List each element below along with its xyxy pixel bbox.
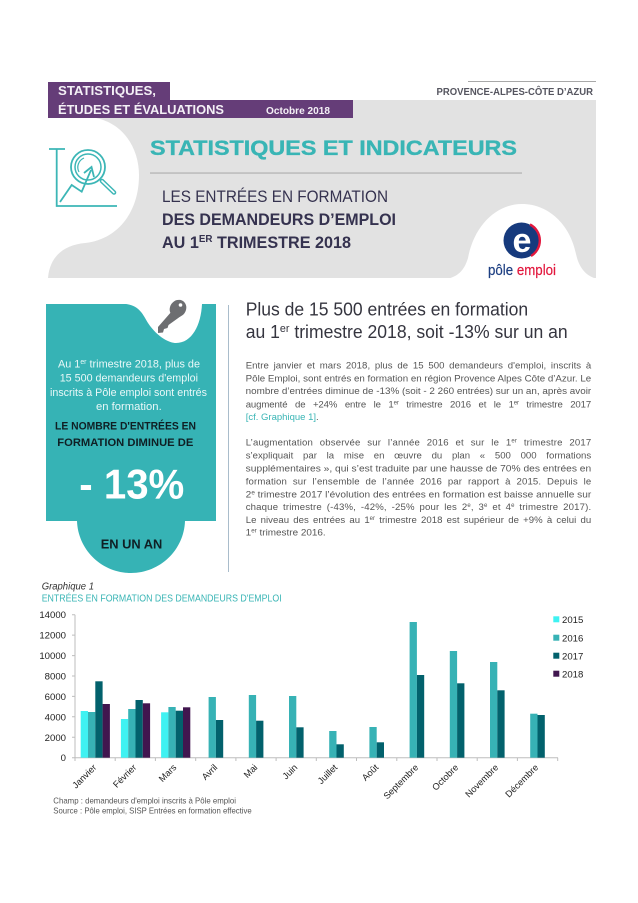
text block: paragraph 2: e bbox=[484, 503, 488, 509]
text block: paragraph 2: e bbox=[511, 503, 515, 509]
intro text: trimestre 2018, plus de bbox=[87, 359, 200, 371]
text block: paragraph 2: supplémentaires », qui s’est traduite par une hausse de 70% des entrées en bbox=[246, 464, 591, 475]
month labels: Septembre bbox=[382, 762, 420, 801]
y axis: 0 bbox=[61, 753, 66, 764]
source note bbox=[53, 795, 252, 815]
icon: chart with magnifier bbox=[49, 149, 117, 206]
month labels: Mars bbox=[157, 762, 179, 784]
statement bbox=[55, 420, 196, 449]
legend: 2016 bbox=[562, 633, 583, 644]
source note: Champ : demandeurs d'emploi inscrits à Pôle emploi bbox=[53, 795, 236, 805]
heading: main finding: trimestre 2018, soit -13% sur un an bbox=[289, 322, 568, 342]
text block: paragraph 1: Pôle Emploi, sont entrés en formation en région Provence Alpes Côte d’Azur. Le bbox=[246, 373, 591, 384]
text block: paragraph 1: [cf. Graphique 1]. bbox=[246, 412, 319, 423]
main title: STATISTIQUES ET INDICATEURS bbox=[150, 137, 517, 160]
intro text bbox=[50, 359, 207, 413]
heading: main finding: au 1 bbox=[246, 322, 281, 342]
text block: paragraph 1 bbox=[246, 360, 592, 423]
intro text: inscrits à Pôle emploi sont entrés bbox=[50, 387, 207, 399]
tab heading: STATISTIQUES, bbox=[58, 84, 156, 98]
logo: pôle emploi bbox=[488, 222, 556, 279]
y axis: 6000 bbox=[45, 692, 66, 703]
y axis: 2000 bbox=[45, 733, 66, 744]
text block: paragraph 2: L’augmentation observée sur l’année 2016 et sur le 1 bbox=[246, 438, 511, 449]
text block: paragraph 2: trimestre 2017). bbox=[515, 502, 591, 513]
logo: pôle emploi: e bbox=[513, 222, 531, 260]
bars 2018 bbox=[103, 703, 190, 758]
chart heading: ENTRÉES EN FORMATION DES DEMANDEURS D'EMPLOI bbox=[42, 592, 282, 605]
month labels: Avril bbox=[200, 762, 219, 782]
text block: paragraph 1: trimestre 2016 et le 1 bbox=[399, 400, 514, 411]
text block: paragraph 2: trimestre 2017 l’évolution des entrées en formation est baisse annuelle sur bbox=[255, 489, 592, 500]
text block: paragraph 2: er bbox=[370, 516, 375, 522]
legend: 2015 bbox=[562, 615, 583, 626]
text block: paragraph 2: , 3 bbox=[471, 502, 484, 513]
text block: paragraph 2 bbox=[246, 438, 592, 538]
text block: paragraph 1: augmenté de +24% entre le 1 bbox=[246, 400, 394, 411]
intro text: Au 1 bbox=[58, 359, 81, 371]
subtitle: LES ENTRÉES EN FORMATION bbox=[162, 187, 388, 206]
bar chart bbox=[39, 610, 583, 801]
text block: paragraph 2: e bbox=[251, 490, 256, 496]
heading: main finding: Plus de 15 500 entrées en formation bbox=[246, 300, 528, 320]
subtitle: TRIMESTRE 2018 bbox=[213, 234, 351, 252]
month labels: Décembre bbox=[503, 762, 540, 799]
month labels bbox=[70, 762, 540, 801]
month labels: Août bbox=[360, 762, 381, 783]
source note: Source : Pôle emploi, SISP Entrées en formation effective bbox=[53, 805, 252, 815]
heading: main finding: er bbox=[280, 323, 290, 335]
legend: 2017 bbox=[562, 651, 583, 662]
month labels: Juin bbox=[280, 762, 299, 781]
period: EN UN AN bbox=[101, 536, 162, 551]
month labels: Janvier bbox=[70, 762, 98, 790]
text block: paragraph 2: formation sur l’ensemble de l’année 2016 par rapport à 2015. Depuis le bbox=[246, 476, 591, 487]
text block: paragraph 1: Entre janvier et mars 2018, plus de 15 500 demandeurs d'emploi, inscrits à bbox=[246, 360, 592, 371]
tab heading: ÉTUDES ET ÉVALUATIONS bbox=[58, 102, 224, 117]
month labels: Mai bbox=[242, 762, 259, 780]
y axis: 4000 bbox=[45, 712, 66, 723]
icon: key bbox=[158, 297, 190, 333]
panel: key figure bbox=[46, 297, 216, 573]
text block: paragraph 2: Le niveau des entrées au 1 bbox=[246, 515, 370, 526]
text block: paragraph 2: et 4 bbox=[488, 502, 512, 513]
heading: main finding bbox=[246, 300, 568, 342]
y axis bbox=[39, 610, 558, 764]
text block: paragraph 2: e bbox=[467, 503, 471, 509]
text block: paragraph 2: trimestre 2016. bbox=[257, 527, 326, 538]
y axis: 14000 bbox=[39, 610, 66, 621]
subtitle: AU 1 bbox=[162, 234, 200, 252]
purple publication tab bbox=[48, 82, 353, 118]
date: Octobre 2018 bbox=[266, 105, 330, 117]
bars 2017 bbox=[95, 675, 545, 758]
chart heading: Graphique 1 bbox=[42, 581, 94, 592]
legend bbox=[553, 615, 583, 680]
statement: FORMATION DIMINUE DE bbox=[57, 437, 193, 449]
chart heading bbox=[42, 581, 282, 605]
text block: paragraph 2: s’expliquait par la mise en œuvre du plan « 500 000 formations bbox=[246, 451, 591, 462]
subtitle: ER bbox=[199, 234, 213, 245]
intro text: 15 500 demandeurs d'emploi bbox=[60, 373, 198, 385]
y axis: 12000 bbox=[39, 631, 66, 642]
intro text: er bbox=[80, 359, 87, 366]
month labels: Février bbox=[111, 762, 138, 790]
intro text: en formation. bbox=[96, 401, 162, 413]
text block: paragraph 1: er bbox=[394, 401, 399, 407]
legend: 2018 bbox=[562, 669, 583, 680]
key number: - 13% bbox=[79, 460, 184, 507]
panel: header banner bbox=[48, 81, 597, 279]
subtitle bbox=[162, 187, 396, 252]
month labels: Juillet bbox=[316, 762, 340, 786]
text block: paragraph 2: 1 bbox=[246, 527, 251, 538]
region name: PROVENCE-ALPES-CÔTE D’AZUR bbox=[436, 85, 593, 98]
text block: paragraph 1: nombre d’entrées diminue de -13% (soit - 2 260 entrées) sur un an, après avoir bbox=[246, 386, 592, 397]
text block: paragraph 2: er bbox=[251, 528, 257, 534]
tab heading bbox=[58, 84, 224, 117]
logo: pôle emploi: pôle emploi bbox=[488, 262, 556, 279]
y axis: 10000 bbox=[39, 651, 66, 662]
text block: paragraph 1: er bbox=[514, 401, 519, 407]
text block: paragraph 1: trimestre 2017 bbox=[519, 400, 591, 411]
month labels: Novembre bbox=[463, 762, 500, 799]
y axis: 8000 bbox=[45, 672, 66, 682]
month labels: Octobre bbox=[430, 762, 460, 793]
bars 2016 bbox=[88, 622, 538, 758]
text block: paragraph 2: er bbox=[511, 439, 517, 445]
subtitle: DES DEMANDEURS D’EMPLOI bbox=[162, 211, 396, 229]
bars 2015 bbox=[81, 711, 168, 758]
text block: paragraph 2: chaque trimestre (-43%, -42%, -25% pour les 2 bbox=[246, 502, 467, 513]
text block: paragraph 2: trimestre 2018 est supérieur de +9% à celui du bbox=[375, 515, 591, 526]
statement: LE NOMBRE D'ENTRÉES EN bbox=[55, 420, 196, 433]
text block: paragraph 2: 2 bbox=[246, 489, 251, 500]
text block: paragraph 2: trimestre 2017 bbox=[517, 438, 591, 449]
